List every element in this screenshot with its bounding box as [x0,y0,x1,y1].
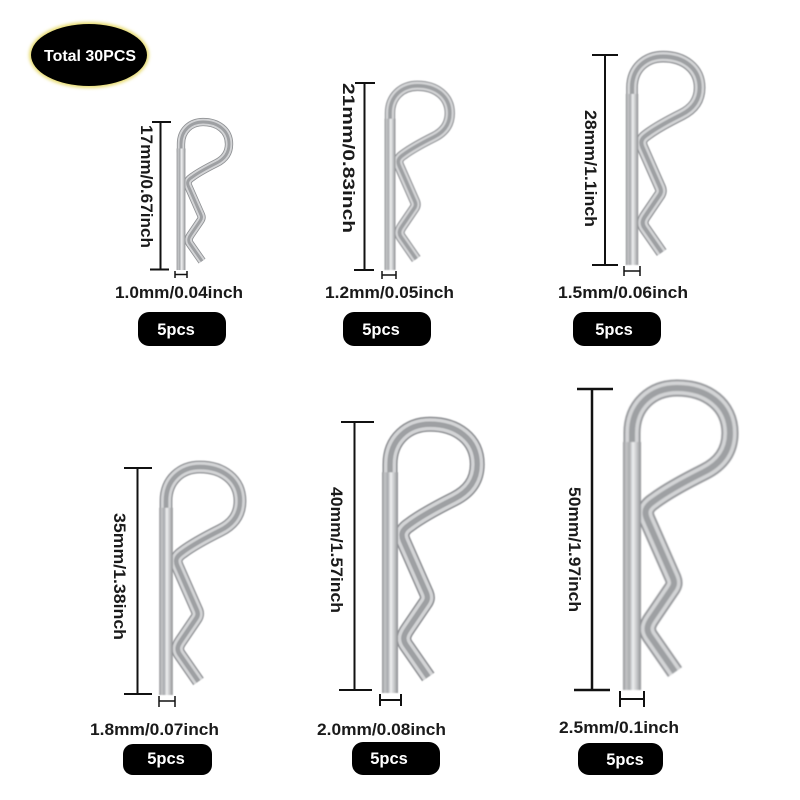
width label 1.8mm: 1.8mm/0.07inch [90,720,219,739]
quantity pill [138,312,226,346]
icon: clip 2.5mm [623,388,730,690]
height bracket 35mm [124,468,152,694]
height label 21mm: 21mm/0.83inch [339,83,358,233]
quantity pill: 5pcs [595,321,633,339]
icon: clip 1.2mm [385,86,450,270]
height label 35mm: 35mm/1.38inch [110,513,129,640]
height label 50mm: 50mm/1.97inch [565,487,584,612]
width bracket 1.2mm [382,271,396,279]
height bracket 40mm [339,422,374,690]
quantity pill [123,744,212,775]
width bracket 2.5mm [620,691,644,707]
height label 40mm: 40mm/1.57inch [327,487,346,613]
width bracket 2.0mm [380,694,401,706]
width bracket 1.0mm [175,271,187,278]
height bracket 50mm [574,389,613,690]
panel: 50mm clip [559,388,730,775]
quantity pill: 5pcs [606,751,644,769]
panel: 21mm clip [325,83,454,346]
height bracket 28mm [592,55,618,265]
quantity pill: 5pcs [157,321,195,339]
icon: clip 1.8mm [159,467,240,695]
panel: 35mm clip [90,467,240,775]
height label 17mm: 17mm/0.67inch [137,125,156,248]
height bracket 21mm [354,83,375,270]
badge: Total 30PCS [29,22,149,88]
panel: 40mm clip [317,422,477,775]
quantity pill: 5pcs [147,750,185,768]
height bracket 17mm [150,122,171,270]
width bracket 1.8mm [159,696,175,707]
height label 28mm: 28mm/1.1inch [581,110,600,227]
width label 1.5mm: 1.5mm/0.06inch [558,283,688,302]
icon: clip 2.0mm [382,424,477,693]
icon: clip 1.5mm [626,57,700,265]
quantity pill [578,743,663,775]
badge: Total 30PCS: Total 30PCS [44,48,136,65]
quantity pill: 5pcs [362,321,400,339]
width bracket 1.5mm [624,266,640,276]
width label 2.5mm: 2.5mm/0.1inch [559,718,679,737]
quantity pill [343,312,431,346]
icon: clip 1.0mm [177,122,229,270]
quantity pill: 5pcs [370,750,408,768]
quantity pill [573,312,661,346]
quantity pill [352,742,440,775]
width label 1.0mm: 1.0mm/0.04inch [115,283,243,302]
width label 1.2mm: 1.2mm/0.05inch [325,283,454,302]
width label 2.0mm: 2.0mm/0.08inch [317,720,446,739]
panel: 28mm clip [558,55,700,346]
panel: 17mm clip [115,122,243,346]
